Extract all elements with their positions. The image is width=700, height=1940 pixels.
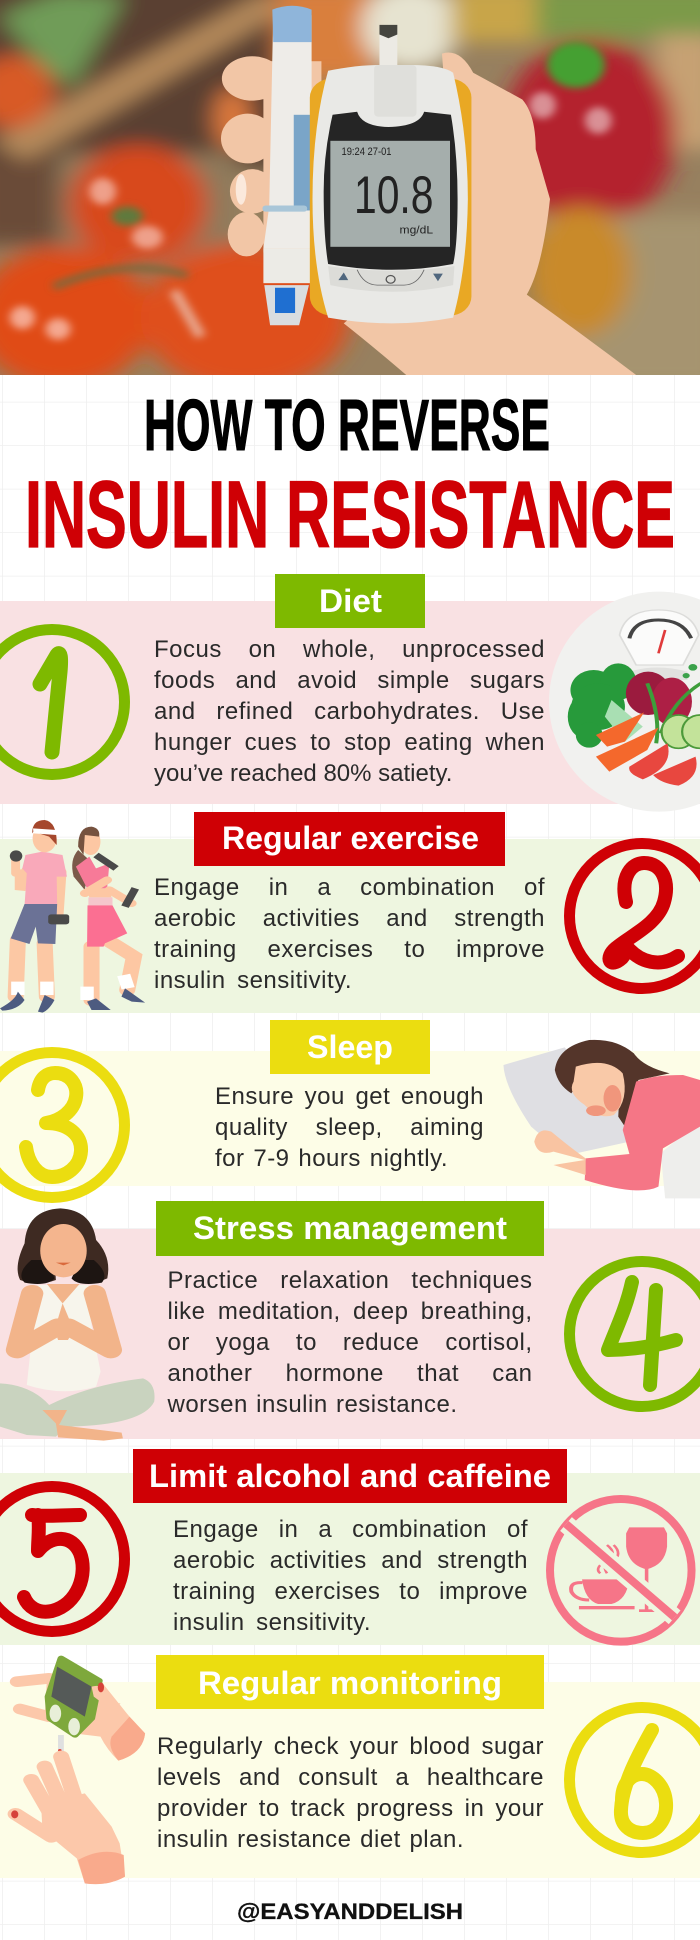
heading: stress management [156, 1201, 544, 1256]
heading: regular monitoring [156, 1655, 544, 1709]
number 1 [0, 624, 130, 780]
test strip [379, 29, 397, 67]
heading: sleep: Sleep [307, 1029, 393, 1065]
panel: diet [0, 601, 700, 804]
text: stress management: Practice relaxation techniques [168, 1267, 532, 1294]
panel: sleep [0, 1051, 700, 1186]
icon: woman meditating [0, 1208, 154, 1441]
text: diet [154, 636, 545, 787]
text: sleep: Ensure you get enough [215, 1083, 484, 1110]
text: limit alcohol and caffeine: insulin sensitivity. [173, 1609, 371, 1636]
heading: sleep [270, 1020, 430, 1074]
lancet pen [263, 9, 312, 249]
text: stress management [168, 1267, 532, 1418]
text: sleep: for 7-9 hours nightly. [215, 1145, 448, 1172]
number 6 [564, 1702, 700, 1858]
icon: woman sleeping on pillow [504, 1040, 700, 1198]
text: diet: foods and avoid simple sugars [154, 667, 545, 694]
icon: hands using glucose meter on fingertip [8, 1656, 146, 1884]
panel: regular exercise [0, 839, 700, 1013]
text: stress management: another hormone that can [168, 1360, 532, 1387]
icon: man and woman exercising with dumbbells [0, 820, 145, 1013]
text: regular exercise: insulin sensitivity. [154, 967, 352, 994]
heading: diet [275, 574, 425, 628]
text: regular exercise: aerobic activities and strength [154, 905, 545, 932]
text: regular exercise: Engage in a combination of [154, 874, 545, 901]
icon: no alcohol or coffee sign [546, 1495, 696, 1646]
text: diet: and refined carbohydrates. Use [154, 698, 545, 725]
panel: stress management [0, 1229, 700, 1439]
heading: diet: Diet [319, 583, 382, 619]
hero photo: glucose meter held in hand over vegetables [0, 0, 700, 375]
number 4 [564, 1256, 700, 1412]
text: limit alcohol and caffeine: training exercises to improve [173, 1578, 528, 1605]
text: regular exercise: training exercises to improve [154, 936, 545, 963]
text: stress management: worsen insulin resistance. [168, 1391, 458, 1418]
text: regular monitoring: levels and consult a healthcare [157, 1764, 544, 1791]
text: sleep [215, 1083, 484, 1172]
text: limit alcohol and caffeine [173, 1516, 528, 1636]
text: regular exercise [154, 874, 545, 994]
meter [310, 78, 471, 316]
icon: plate of vegetables with scale [549, 592, 700, 812]
panel: limit alcohol and caffeine [0, 1473, 700, 1645]
heading: regular exercise [194, 812, 505, 866]
text: limit alcohol and caffeine: aerobic activities and strength [173, 1547, 528, 1574]
hero photo: glucose meter held in hand over vegetables: 10.8 [354, 166, 433, 225]
text: regular monitoring: provider to track progress in your [157, 1795, 544, 1822]
text: diet: Focus on whole, unprocessed [154, 636, 545, 663]
text: regular monitoring: Regularly check your blood sugar [157, 1733, 544, 1760]
heading: regular monitoring: Regular monitoring [198, 1665, 502, 1701]
heading: limit alcohol and caffeine [133, 1449, 567, 1503]
number 5 [0, 1481, 130, 1637]
text: regular monitoring: insulin resistance diet plan. [157, 1826, 464, 1853]
number 2 [564, 838, 700, 994]
text: regular monitoring [157, 1733, 544, 1853]
heading: limit alcohol and caffeine: Limit alcohol and caffeine [149, 1458, 551, 1494]
footer handle: @EASYANDDELISH [237, 1899, 463, 1924]
text: stress management: or yoga to reduce cortisol, [168, 1329, 532, 1356]
title [25, 386, 675, 565]
heading: stress management: Stress management [193, 1210, 507, 1246]
heading: regular exercise: Regular exercise [222, 820, 479, 856]
number 3 [0, 1047, 130, 1203]
hero photo: glucose meter held in hand over vegetables: mg/dL [400, 223, 433, 236]
panel: regular monitoring [0, 1682, 700, 1878]
text: diet: hunger cues to stop eating when [154, 729, 545, 756]
text: stress management: like meditation, deep breathing, [168, 1298, 532, 1325]
hero photo: glucose meter held in hand over vegetables: 19:24 27-01 [342, 145, 392, 158]
text: sleep: quality sleep, aiming [215, 1114, 484, 1141]
hand [221, 52, 636, 375]
text: diet: you’ve reached 80% satiety. [154, 760, 452, 787]
text: limit alcohol and caffeine: Engage in a combination of [173, 1516, 528, 1543]
